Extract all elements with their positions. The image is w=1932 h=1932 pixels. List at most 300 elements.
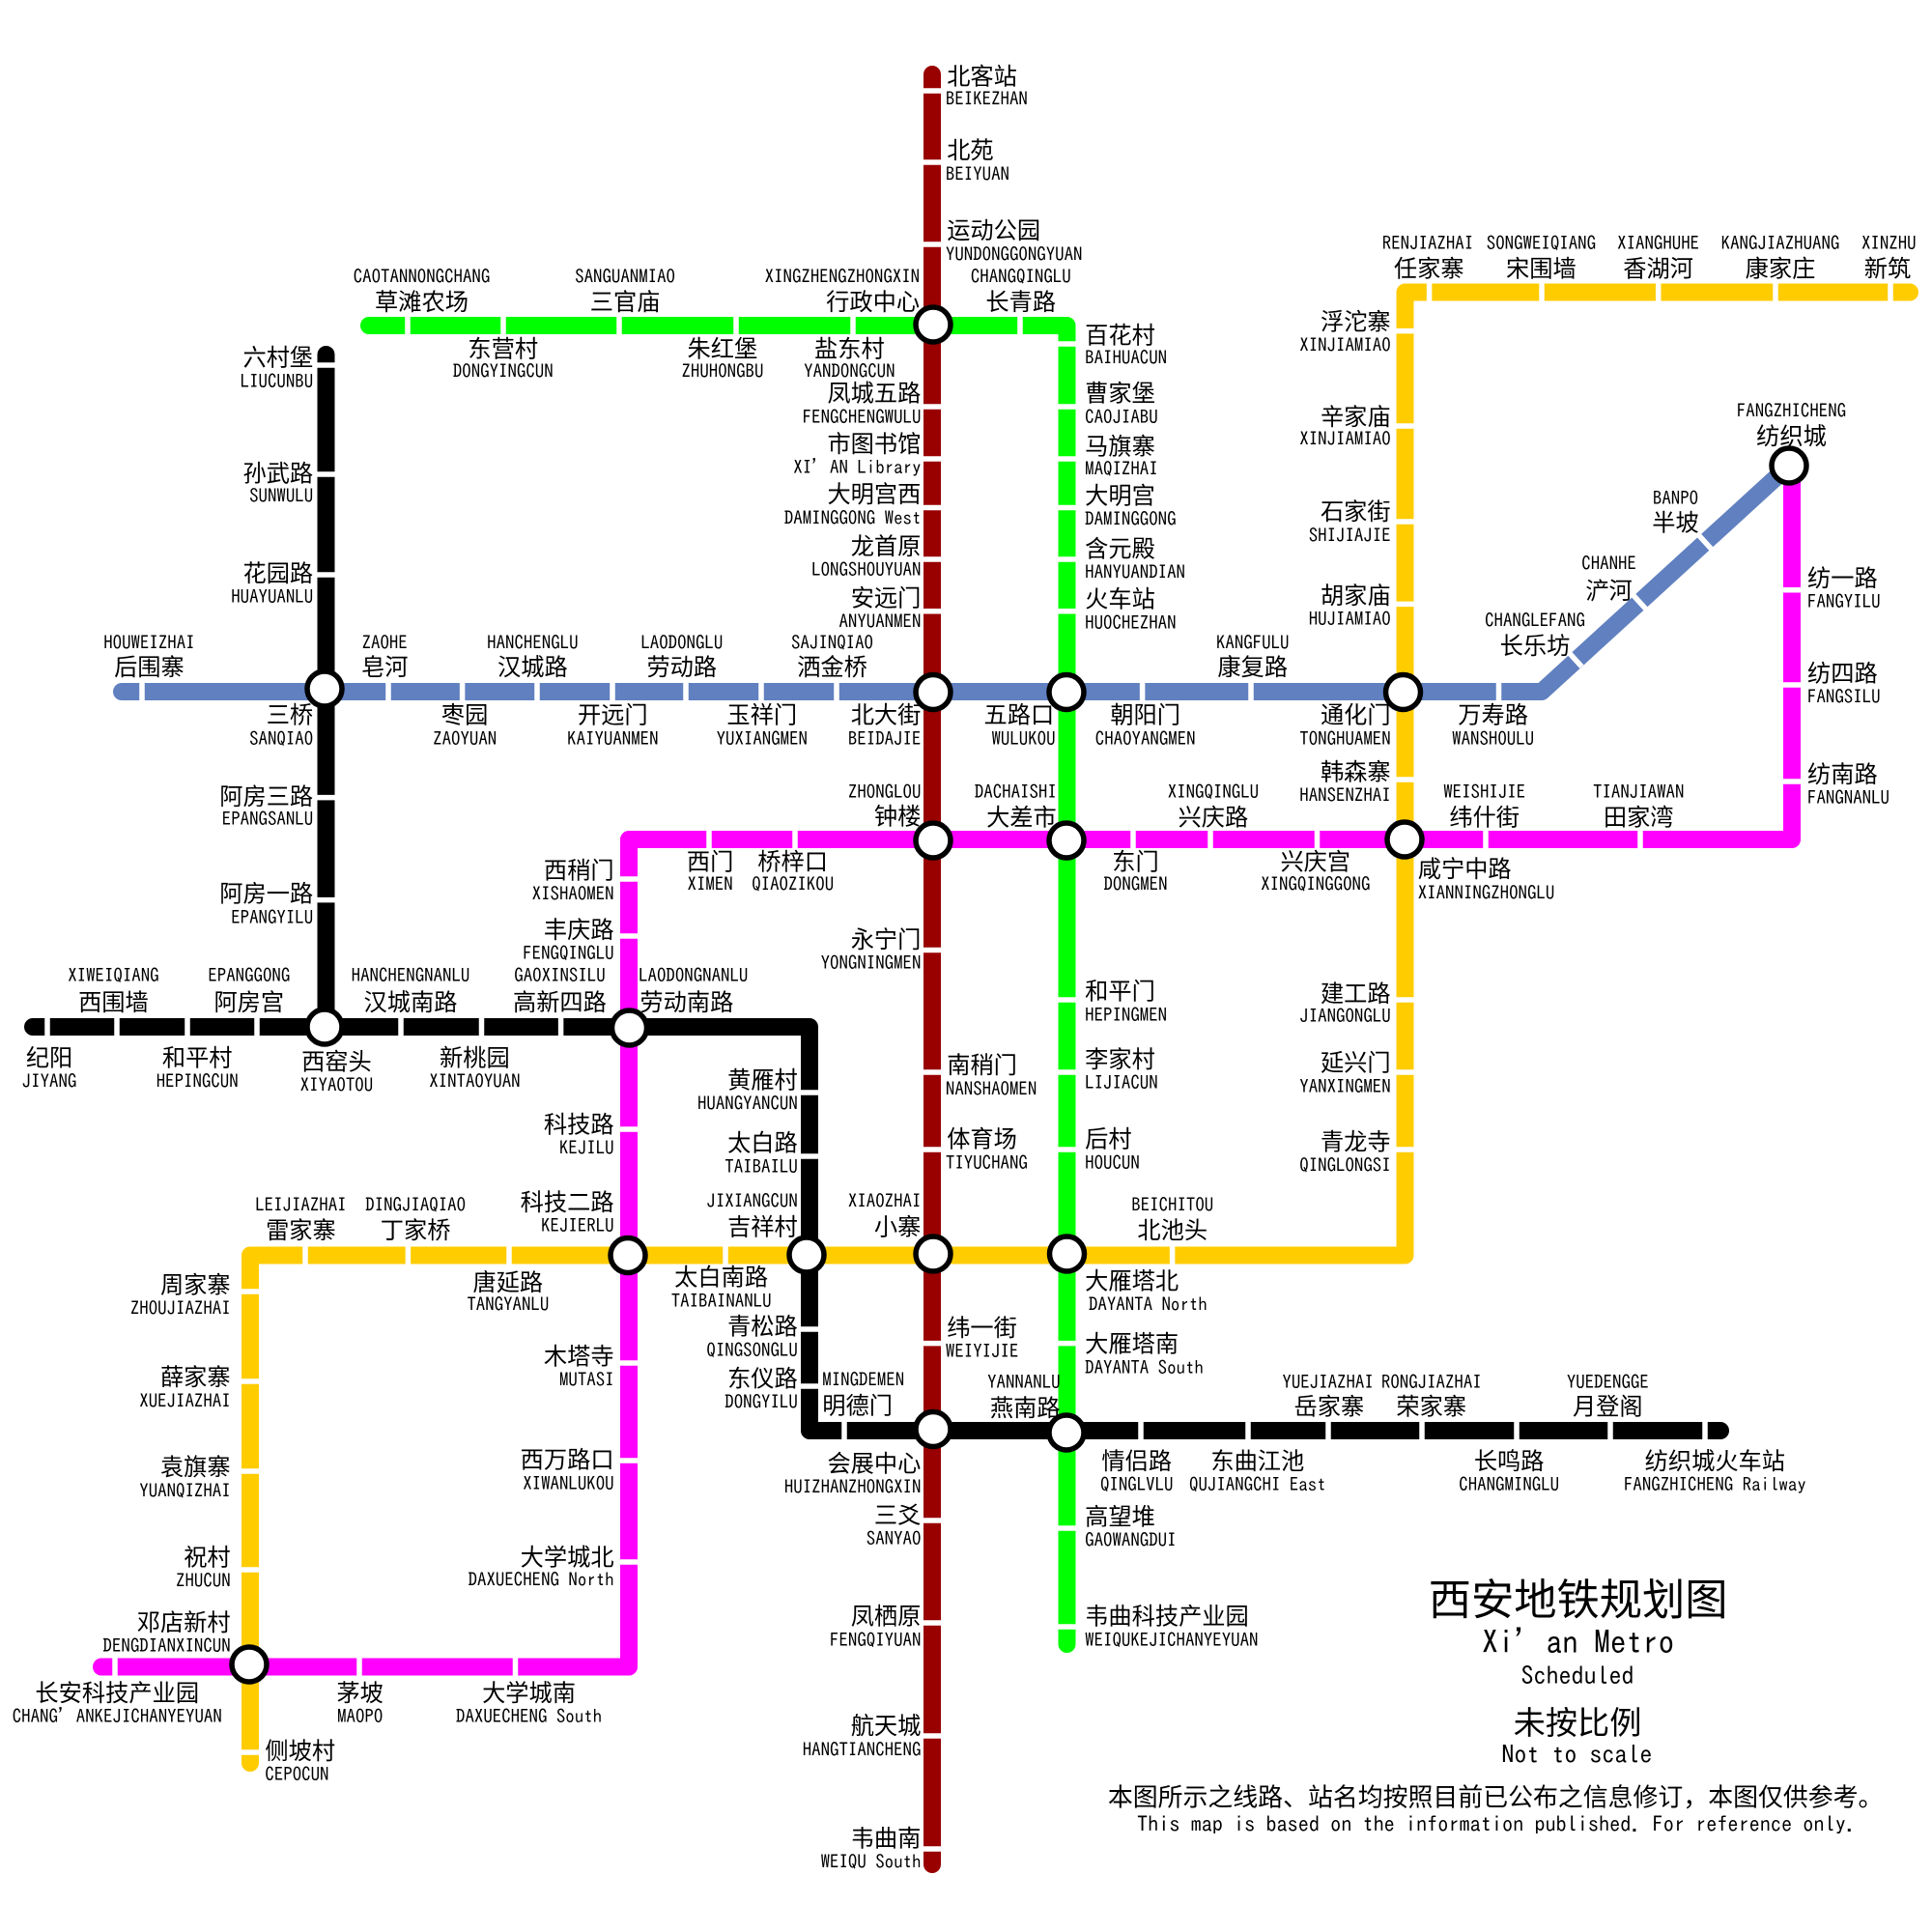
label: 纺南路: 纺南路	[1807, 762, 1878, 788]
label: 青松路	[706, 1315, 798, 1359]
label: 北池头: 北池头	[1137, 1218, 1208, 1244]
label: 凤城五路	[803, 382, 921, 426]
label: 孙武路	[242, 462, 313, 505]
label: 东曲江池: 东曲江池	[1210, 1449, 1304, 1475]
label: 大明宫	[1085, 483, 1177, 528]
label: 大雁塔南	[1085, 1332, 1204, 1377]
label: 咸宁中路	[1418, 857, 1554, 902]
label: 长乐坊: CHANGLEFANG	[1485, 611, 1585, 630]
label: 汉城路: HANCHENGLU	[487, 634, 579, 652]
label: 辛家庙	[1299, 405, 1391, 448]
label: 北大街: 北大街	[851, 703, 921, 729]
label: 桥梓口: QIAOZIKOU	[752, 875, 834, 894]
label: 三桥: 三桥	[267, 703, 313, 729]
label: 祝村: ZHUCUN	[176, 1572, 231, 1590]
label: 草滩农场: 草滩农场	[375, 290, 469, 316]
label: 长安科技产业园	[13, 1681, 222, 1726]
label: 市图书馆: XI’AN Library	[793, 459, 921, 477]
label: 兴庆宫	[1261, 850, 1370, 894]
label: 太白路: 太白路	[727, 1131, 798, 1157]
label: 永宁门: YONGNINGMEN	[821, 954, 921, 973]
label: 阿房一路	[219, 882, 313, 926]
label: 钟楼: 钟楼	[874, 804, 921, 830]
label: 会展中心	[784, 1451, 921, 1496]
label: 黄雁村: 黄雁村	[727, 1067, 798, 1094]
interchange stations	[232, 307, 1806, 1682]
label: 马旗寨	[1085, 434, 1158, 478]
label: 朝阳门: 朝阳门	[1110, 703, 1180, 729]
label: 纺四路	[1807, 661, 1881, 706]
label: 草滩农场	[354, 268, 490, 316]
label: 大学城南: DAXUECHENG South	[456, 1708, 602, 1726]
label: 花园路: HUAYUANLU	[231, 588, 313, 607]
label: 后村: HOUCUN	[1085, 1153, 1140, 1172]
label: 燕南路: 燕南路	[990, 1396, 1061, 1422]
label: 辛家庙: XINJIAMIAO	[1299, 430, 1391, 448]
label: 北苑	[946, 138, 1009, 184]
label: 康复路	[1216, 634, 1289, 681]
label: 韦曲南	[821, 1826, 921, 1871]
label: 纬什街: WEISHIJIE	[1443, 782, 1525, 801]
label: 劳动南路	[639, 966, 748, 1016]
label: 宋围墙: SONGWEIQIANG	[1487, 234, 1596, 252]
label: 大明宫西	[784, 482, 921, 527]
line: blue	[122, 466, 1789, 701]
label: 唐延路	[467, 1270, 549, 1314]
label: 长安科技产业园: 长安科技产业园	[35, 1681, 199, 1707]
label: 西万路口: 西万路口	[521, 1448, 614, 1474]
label: 高望堆: 高望堆	[1085, 1504, 1155, 1530]
label: 东仪路	[724, 1366, 798, 1411]
label: 东仪路: 东仪路	[727, 1366, 798, 1392]
label: 吉祥村: 吉祥村	[727, 1214, 798, 1240]
label: 胡家庙	[1309, 583, 1391, 629]
label: 科技二路: KEJIERLU	[541, 1217, 614, 1236]
label: 和平门: HEPINGMEN	[1085, 1006, 1167, 1024]
label: 长乐坊	[1485, 611, 1585, 660]
label: 万寿路: 万寿路	[1458, 703, 1528, 729]
label: 南稍门	[946, 1053, 1037, 1098]
label: 阿房三路: 阿房三路	[219, 784, 313, 810]
label: 东门	[1103, 850, 1168, 894]
label: 六村堡	[241, 346, 313, 390]
label: 西万路口	[521, 1448, 614, 1492]
label: 周家寨	[130, 1272, 231, 1318]
label: 北苑: 北苑	[947, 138, 994, 164]
note: not to scale English: Not to scale	[1501, 1743, 1652, 1768]
label: 南稍门: NANSHAOMEN	[946, 1080, 1037, 1098]
label: 纺织城: FANGZHICHENG	[1737, 402, 1846, 420]
label: 袁旗寨	[139, 1455, 231, 1500]
label: 太白南路: TAIBAINANLU	[671, 1292, 772, 1310]
label: 后村	[1085, 1127, 1140, 1172]
label: 韩森寨: HANSENZHAI	[1299, 786, 1391, 805]
label: 延兴门	[1299, 1051, 1391, 1095]
label: 马旗寨: MAQIZHAI	[1085, 460, 1158, 478]
label: 薛家寨: XUEJIAZHAI	[139, 1392, 231, 1410]
label: 和平门	[1085, 980, 1167, 1024]
label: 明德门: MINGDEMEN	[822, 1371, 904, 1389]
label: 市图书馆	[793, 432, 921, 477]
label: 祝村: 祝村	[184, 1545, 231, 1571]
label: 邓店新村: 邓店新村	[137, 1610, 231, 1636]
label: 香湖河: XIANGHUHE	[1617, 234, 1699, 252]
label: 兴庆路: XINGQINGLU	[1168, 782, 1259, 801]
label: 兴庆宫: XINGQINGGONG	[1261, 875, 1370, 894]
label: 三官庙: 三官庙	[590, 290, 660, 316]
label: 高望堆: GAOWANGDUI	[1085, 1531, 1177, 1549]
label: 含元殿	[1085, 536, 1185, 582]
label: 劳动路: LAODONGLU	[640, 634, 723, 652]
label: 万寿路: WANSHOULU	[1452, 729, 1534, 748]
label: 科技二路: 科技二路	[521, 1190, 614, 1216]
label: 任家寨	[1382, 234, 1473, 283]
label: 半坡: BANPO	[1653, 490, 1698, 508]
label: 长乐坊: 长乐坊	[1500, 634, 1570, 660]
label: 石家街: 石家街	[1321, 499, 1391, 526]
label: 纬一街	[946, 1316, 1018, 1361]
label: 三爻: 三爻	[874, 1503, 921, 1529]
label: 通化门	[1299, 703, 1391, 748]
label: 盐东村: YANDONGCUN	[804, 362, 895, 381]
label: 韦曲科技产业园	[1085, 1605, 1258, 1649]
label: 大雁塔北	[1085, 1268, 1208, 1314]
label: 阿房宫: EPANGGONG	[208, 966, 290, 984]
label: 韦曲南: WEIQU South	[821, 1853, 921, 1871]
label: 吉祥村: JIXIANGCUN	[706, 1192, 798, 1210]
label: 西窑头	[300, 1049, 373, 1094]
label: 新桃园: 新桃园	[440, 1045, 510, 1071]
label: 丰庆路: 丰庆路	[544, 918, 614, 944]
label: 青龙寺: 青龙寺	[1321, 1129, 1391, 1155]
label: 枣园: ZAOYUAN	[433, 729, 497, 748]
label: 北大街	[848, 703, 921, 748]
label: 浮沱寨	[1299, 310, 1391, 355]
label: 长鸣路	[1459, 1449, 1559, 1494]
label: 大雁塔北: 大雁塔北	[1085, 1268, 1179, 1294]
label: 康家庄: 康家庄	[1746, 257, 1815, 283]
label: 枣园: 枣园	[441, 703, 488, 729]
label: 高望堆	[1085, 1504, 1177, 1549]
label: 太白路: TAIBAILU	[724, 1157, 798, 1176]
label: 东营村: DONGYINGCUN	[453, 362, 554, 381]
label: 木塔寺: MUTASI	[559, 1371, 614, 1389]
label: 汉城路: 汉城路	[497, 655, 568, 681]
label: 纬一街: 纬一街	[947, 1316, 1017, 1342]
label: 后村: 后村	[1085, 1127, 1132, 1153]
label: 宋围墙: 宋围墙	[1506, 257, 1577, 283]
label: 大雁塔南: DAYANTA South	[1085, 1358, 1204, 1377]
label: 小寨: 小寨	[874, 1214, 921, 1240]
label: 玉祥门: YUXIANGMEN	[717, 729, 808, 748]
label: 大学城北: 大学城北	[521, 1545, 614, 1571]
label: 阿房一路: EPANGYILU	[231, 908, 313, 926]
label: 雷家寨	[255, 1196, 347, 1244]
label: 香湖河	[1617, 234, 1699, 283]
label: 新筑: XINZHU	[1861, 234, 1917, 252]
label: 纺织城火车站	[1624, 1449, 1806, 1494]
label: 太白路	[724, 1131, 798, 1176]
label: 雷家寨: LEIJIAZHAI	[255, 1196, 347, 1214]
label: 含元殿: 含元殿	[1085, 536, 1155, 562]
label: 大差市	[975, 782, 1057, 832]
label: 浮沱寨: XINJIAMIAO	[1299, 336, 1391, 355]
label: 兴庆路: 兴庆路	[1179, 806, 1248, 832]
label: 高新四路	[513, 966, 607, 1016]
label: 情侣路: 情侣路	[1101, 1449, 1172, 1475]
disclaimer: Chinese: 本图所示之线路、站名均按照目前已公布之信息修订，本图仅供参考。	[1108, 1783, 1883, 1811]
label: 盐东村: 盐东村	[814, 337, 885, 363]
label: 明德门: 明德门	[822, 1393, 893, 1419]
label: 明德门	[822, 1371, 904, 1419]
label: 开远门: 开远门	[578, 703, 648, 729]
label: 曹家堡	[1085, 382, 1158, 426]
label: 西稍门: 西稍门	[544, 858, 614, 884]
label: 阿房宫: 阿房宫	[213, 990, 284, 1016]
label: 皂河: 皂河	[361, 655, 408, 681]
label: 石家街	[1309, 499, 1391, 545]
label: 黄雁村	[697, 1067, 798, 1113]
label: 东仪路: DONGYILU	[724, 1393, 798, 1411]
label: 凤栖原: 凤栖原	[851, 1605, 921, 1631]
label: 南稍门: 南稍门	[947, 1053, 1017, 1079]
label: 行政中心	[765, 268, 920, 316]
label: 高新四路: GAOXINSILU	[514, 966, 606, 984]
label: 新筑	[1861, 234, 1917, 283]
label: 茅坡: MAOPO	[337, 1708, 383, 1726]
label: 新桃园	[429, 1045, 521, 1091]
label: 纺四路: 纺四路	[1807, 661, 1878, 687]
label: 田家湾	[1593, 782, 1684, 832]
label: 情侣路	[1100, 1449, 1173, 1494]
label: 和平村: HEPINGCUN	[156, 1072, 239, 1091]
label: 曹家堡: CAOJIABU	[1085, 408, 1158, 426]
label: 袁旗寨: 袁旗寨	[160, 1455, 231, 1481]
label: 太白南路: 太白南路	[674, 1265, 768, 1292]
label: 花园路: 花园路	[242, 561, 313, 587]
label: 大明宫西: DAMINGGONG West	[784, 509, 921, 527]
label: 皂河: ZAOHE	[362, 634, 408, 652]
label: 长青路: CHANGQINGLU	[971, 268, 1071, 286]
label: 东营村: 东营村	[468, 337, 538, 363]
label: 五路口	[984, 703, 1056, 748]
label: 田家湾: 田家湾	[1604, 806, 1674, 832]
label: 凤栖原: FENGQIYUAN	[830, 1631, 921, 1649]
label: 李家村	[1085, 1047, 1158, 1092]
subtitle: Scheduled: Scheduled	[1520, 1663, 1634, 1689]
label: 李家村: 李家村	[1085, 1047, 1155, 1073]
label: 茅坡	[336, 1681, 384, 1726]
label: 祝村	[176, 1545, 231, 1590]
label: 汉城路	[487, 634, 579, 681]
label: 建工路	[1299, 981, 1391, 1026]
label: 建工路: JIANGONGLU	[1299, 1008, 1391, 1026]
label: 邓店新村: DENGDIANXINCUN	[103, 1637, 231, 1656]
label: 大学城南: 大学城南	[482, 1681, 576, 1707]
label: 半坡: 半坡	[1652, 511, 1699, 537]
label: 吉祥村	[706, 1192, 798, 1240]
label: 洒金桥: SAJINQIAO	[791, 634, 873, 652]
label: 纬什街	[1443, 782, 1525, 832]
label: 侧坡村	[265, 1739, 335, 1783]
line: green	[369, 316, 1077, 1644]
label: 纺一路: FANGYILU	[1807, 593, 1881, 611]
label: 岳家寨	[1282, 1374, 1374, 1421]
label: 朱红堡: ZHUHONGBU	[681, 362, 763, 381]
title: English: Xi’an Metro	[1482, 1626, 1674, 1658]
label: 洒金桥: 洒金桥	[797, 655, 867, 681]
label: 兴庆宫: 兴庆宫	[1280, 850, 1350, 876]
label: 含元殿: HANYUANDIAN	[1085, 563, 1185, 582]
label: 朝阳门	[1095, 703, 1196, 748]
label: 西围墙: XIWEIQIANG	[68, 966, 159, 984]
label: 青龙寺	[1299, 1129, 1391, 1175]
label: 火车站: 火车站	[1085, 587, 1155, 613]
line: magenta	[101, 466, 1802, 1677]
label: 后围寨: HOUWEIZHAI	[103, 634, 195, 652]
label: 六村堡: LIUCUNBU	[241, 372, 313, 390]
label: 大明宫西: 大明宫西	[827, 482, 921, 508]
label: 浐河: CHANHE	[1581, 554, 1636, 573]
label: 和平村: 和平村	[162, 1045, 233, 1071]
label: 北客站: 北客站	[947, 65, 1017, 91]
label: 后围寨	[103, 634, 195, 681]
label: 北苑: BEIYUAN	[946, 165, 1009, 184]
label: 科技路	[544, 1112, 614, 1157]
label: 燕南路	[987, 1374, 1061, 1422]
label: 钟楼: ZHONGLOU	[848, 782, 921, 801]
label: 后围寨: 后围寨	[114, 655, 185, 681]
label: 辛家庙: 辛家庙	[1321, 405, 1391, 431]
label: 万寿路	[1452, 703, 1534, 748]
label: 三桥: SANQIAO	[249, 729, 313, 748]
label: 科技路: KEJILU	[559, 1139, 614, 1157]
label: 和平村	[156, 1045, 239, 1091]
label: 龙首原	[811, 534, 921, 580]
label: 浐河	[1581, 554, 1636, 605]
label: 纺织城: 纺织城	[1756, 424, 1827, 450]
label: 纺织城	[1737, 402, 1846, 450]
label: 龙首原: LONGSHOUYUAN	[811, 561, 921, 580]
label: 会展中心: 会展中心	[827, 1451, 921, 1477]
label: 康复路: KANGFULU	[1216, 634, 1289, 652]
line: black	[33, 355, 1720, 1440]
label: 通化门: 通化门	[1321, 703, 1391, 729]
label: 岳家寨: YUEJIAZHAI	[1282, 1374, 1374, 1392]
label: 朱红堡: 朱红堡	[688, 337, 757, 363]
note: not to scale Chinese: 未按比例	[1514, 1706, 1641, 1742]
label: 月登阁	[1567, 1374, 1649, 1421]
label: 枣园	[433, 703, 497, 748]
label: 小寨: XIAOZHAI	[848, 1192, 921, 1210]
label: 孙武路: SUNWULU	[249, 487, 313, 505]
label: 雷家寨: 雷家寨	[266, 1218, 336, 1244]
label: 月登阁: YUEDENGGE	[1567, 1374, 1649, 1392]
label: 延兴门: 延兴门	[1321, 1051, 1391, 1077]
label: 丰庆路	[523, 918, 614, 962]
label: 青龙寺: QINGLONGSI	[1299, 1156, 1391, 1175]
label: 安远门	[838, 585, 921, 631]
label: 韦曲科技产业园: 韦曲科技产业园	[1085, 1605, 1249, 1631]
label: 纺南路: FANGNANLU	[1807, 789, 1889, 808]
label: 汉城南路	[352, 966, 469, 1016]
label: 西门: XIMEN	[688, 875, 733, 894]
label: 大明宫: DAMINGGONG	[1085, 510, 1177, 528]
label: 长鸣路: CHANGMINGLU	[1459, 1476, 1559, 1494]
label: 任家寨: 任家寨	[1394, 257, 1464, 283]
label: 盐东村	[804, 337, 895, 381]
label: 开远门: KAIYUANMEN	[567, 729, 659, 748]
label: 胡家庙: 胡家庙	[1321, 583, 1391, 610]
label: 韩森寨	[1299, 759, 1391, 805]
label: 唐延路: 唐延路	[472, 1270, 543, 1296]
label: 侧坡村: CEPOCUN	[265, 1765, 328, 1783]
label: 小寨	[848, 1192, 921, 1240]
line: yellow	[241, 282, 1910, 1763]
label: 纬什街: 纬什街	[1449, 806, 1520, 832]
label: 安远门: ANYUANMEN	[838, 612, 921, 631]
label: 百花村: 百花村	[1085, 324, 1155, 350]
label: 周家寨: ZHOUJIAZHAI	[130, 1299, 231, 1318]
label: 长青路	[971, 268, 1071, 316]
label: 大差市: DACHAISHI	[975, 782, 1057, 801]
label: 汉城南路: 汉城南路	[364, 990, 457, 1016]
label: 三官庙: SANGUANMIAO	[575, 268, 675, 286]
label: 科技二路	[521, 1190, 614, 1236]
label: 田家湾: TIANJIAWAN	[1593, 782, 1684, 801]
label: 纺一路: 纺一路	[1807, 566, 1878, 592]
label: 会展中心: HUIZHANZHONGXIN	[784, 1478, 921, 1496]
label: 五路口: 五路口	[984, 703, 1054, 729]
label: 马旗寨: 马旗寨	[1085, 434, 1155, 460]
label: 纺一路	[1807, 566, 1881, 611]
label: 和平门: 和平门	[1085, 980, 1155, 1006]
label: 北池头: BEICHITOU	[1131, 1196, 1213, 1214]
label: 袁旗寨: YUANQIZHAI	[139, 1482, 231, 1500]
label: 通化门: TONGHUAMEN	[1299, 729, 1391, 748]
label: 凤城五路: 凤城五路	[827, 382, 921, 408]
label: 唐延路: TANGYANLU	[467, 1295, 549, 1314]
label: 纺南路	[1807, 762, 1889, 808]
label: 木塔寺: 木塔寺	[544, 1344, 614, 1370]
label: 纪阳	[22, 1045, 76, 1091]
label: 兴庆路	[1168, 782, 1259, 832]
label: 曹家堡: 曹家堡	[1085, 382, 1155, 408]
label: 运动公园	[946, 218, 1082, 264]
label: 西窑头: 西窑头	[301, 1049, 372, 1075]
title block	[1108, 1577, 1883, 1834]
label: 朝阳门: CHAOYANGMEN	[1095, 729, 1196, 748]
label: 黄雁村: HUANGYANCUN	[697, 1094, 798, 1113]
label: 永宁门: 永宁门	[851, 927, 921, 953]
label: 荣家寨: 荣家寨	[1396, 1395, 1466, 1421]
label: 韩森寨: 韩森寨	[1321, 759, 1391, 785]
label: 东营村	[453, 337, 554, 381]
label: 阿房宫	[208, 966, 290, 1016]
label: 石家街: SHIJIAJIE	[1309, 526, 1391, 545]
label: 行政中心: XINGZHENGZHONGXIN	[765, 268, 920, 286]
label: 三爻: SANYAO	[867, 1530, 921, 1548]
label: 汉城南路: HANCHENGNANLU	[352, 966, 469, 984]
label: 侧坡村: 侧坡村	[265, 1739, 335, 1765]
label: 劳动路	[640, 634, 723, 681]
label: 玉祥门	[717, 703, 808, 748]
label: 情侣路: QINGLVLU	[1100, 1476, 1173, 1494]
label: 钟楼	[848, 782, 921, 830]
label: 西门: 西门	[687, 850, 733, 876]
label: 月登阁: 月登阁	[1573, 1395, 1643, 1421]
label: 茅坡: 茅坡	[336, 1681, 384, 1707]
